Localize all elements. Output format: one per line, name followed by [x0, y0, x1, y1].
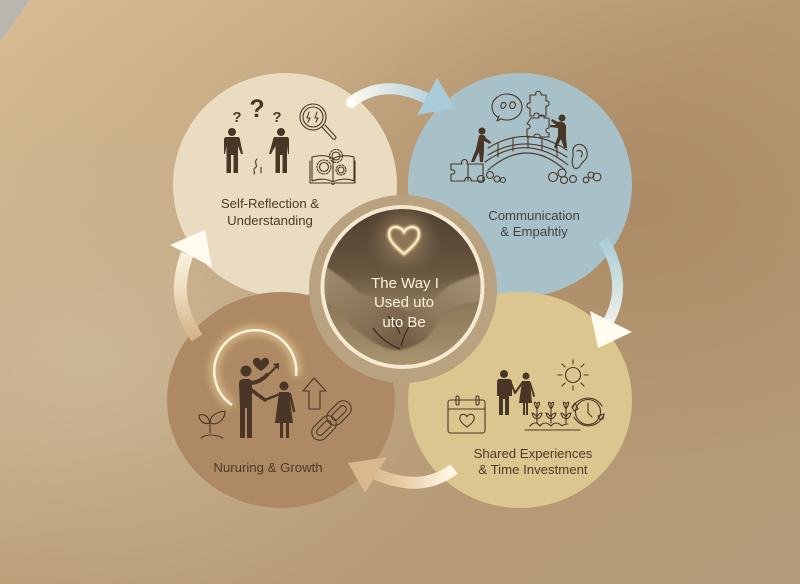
icon: two people with question marks: ?	[272, 109, 282, 126]
panel: self-reflection circle	[173, 73, 397, 297]
label: shared experiences: Shared Experiences	[474, 446, 593, 461]
arrow: self-reflection to communication	[346, 78, 455, 115]
icon: glowing arc	[214, 330, 296, 405]
label: shared experiences	[474, 446, 593, 477]
icon: calendar with heart	[448, 396, 485, 433]
icon: chain link	[308, 397, 355, 444]
icon: clouds	[478, 169, 601, 184]
arrow: shared experiences to nurturing	[348, 457, 454, 493]
center photo with hands	[320, 205, 486, 369]
arrow: communication to shared experiences	[590, 240, 632, 348]
icon: up arrow	[303, 378, 326, 409]
arrow: nurturing to self-reflection	[170, 230, 212, 338]
icon: seedling	[199, 411, 225, 438]
icon: two people with question marks: ?	[249, 95, 265, 123]
label: self-reflection: Understanding	[227, 213, 313, 228]
label: communication	[488, 208, 580, 239]
label: communication: & Empahtiy	[500, 224, 568, 239]
panel: shared experiences circle	[408, 292, 632, 508]
icon: adult and child	[239, 358, 294, 438]
center ring	[309, 195, 497, 383]
center title: uto Be	[382, 314, 426, 331]
icon: open book with gears	[310, 150, 355, 184]
center title: Used uto	[374, 294, 434, 311]
center title	[371, 275, 439, 331]
panel: communication circle	[408, 73, 632, 297]
center title: The Way I	[371, 275, 439, 292]
icon: puzzle pieces	[451, 91, 549, 181]
icon: couple holding hands	[497, 370, 534, 415]
icon: bridge with two figures	[471, 114, 568, 170]
icon: two people with question marks	[224, 95, 289, 174]
panel: nurturing circle	[167, 292, 395, 508]
icon: ear	[572, 144, 587, 168]
label: nururing and growth: Nururing & Growth	[213, 460, 323, 475]
icon: speech bubble	[492, 94, 522, 121]
label: self-reflection: Self-Reflection &	[221, 196, 319, 211]
icon: magnifying glass	[300, 104, 336, 139]
icon: sun	[558, 360, 588, 390]
label: shared experiences: & Time Investment	[478, 462, 588, 477]
icon: clock with cycle arrows	[572, 398, 604, 426]
icon: glowing heart	[380, 214, 428, 262]
icon: growing plants	[525, 402, 580, 430]
icon: two people with question marks: ?	[232, 109, 242, 126]
label: self-reflection	[221, 196, 319, 228]
label: communication: Communication	[488, 208, 580, 223]
